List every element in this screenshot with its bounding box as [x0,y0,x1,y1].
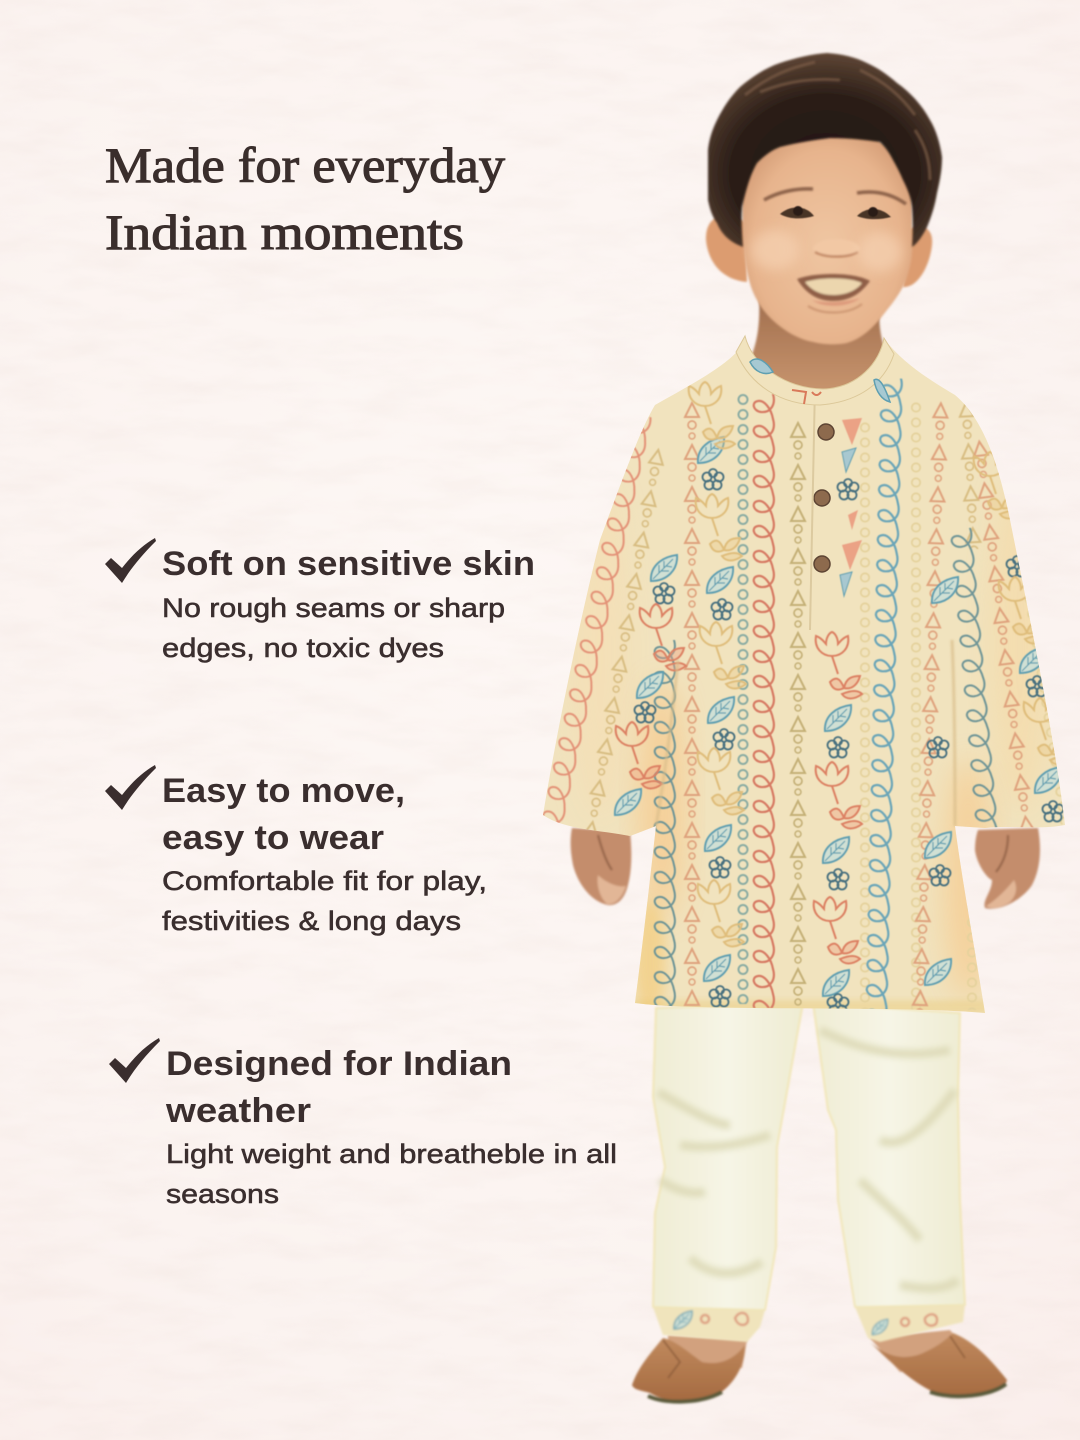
hair [708,53,942,247]
ears [706,216,932,287]
neck [750,285,885,395]
heading: designed for Indian weather [165,1045,512,1130]
placket [810,385,815,630]
text: soft on sensitive skin detail: edges, no toxic dyes [162,633,444,663]
illustration: smiling boy in printed kurta [537,53,1073,1402]
title [105,137,505,260]
right hand [975,828,1040,909]
heading: designed for Indian weather: weather [165,1092,311,1130]
eyes [780,206,891,219]
buttons [814,424,834,572]
title: Made for everyday [105,137,505,193]
smile [797,274,870,313]
pyjama trousers [653,1003,965,1342]
collar print [750,359,890,404]
print columns [537,378,1073,1012]
print motifs [615,382,1070,1014]
text: easy to move detail: festivities & long days [162,906,461,936]
benefit: designed for Indian weather [109,1038,617,1209]
heading: easy to move, easy to wear: Easy to move, [162,772,405,810]
kurta [537,340,1073,1020]
text: designed for Indian weather detail: Light weight and breatheble in all [166,1139,617,1169]
heading: designed for Indian weather: Designed for Indian [166,1045,512,1083]
text: easy to move detail [162,866,487,936]
benefit: soft on sensitive skin [105,538,535,663]
benefit: easy to move [105,765,487,936]
heading: easy to move, easy to wear [162,772,405,857]
text: designed for Indian weather detail: seasons [166,1179,279,1209]
kurta tints [572,470,1050,1020]
text: soft on sensitive skin detail: No rough seams or sharp [162,593,505,623]
text: soft on sensitive skin detail [162,593,505,663]
title: Indian moments [105,204,464,260]
kurta sleeve seams [656,640,955,826]
heading: soft on sensitive skin: Soft on sensitive skin [162,545,535,583]
collar [736,336,894,405]
nose [813,239,860,256]
text: easy to move detail: Comfortable fit for play, [162,866,487,896]
left hand [571,828,631,905]
icon: check mark [109,1038,160,1083]
icon: check mark [105,765,156,810]
text: designed for Indian weather detail [166,1139,617,1209]
cheeks [751,230,902,272]
shoes [632,1330,1007,1402]
face [742,125,912,344]
heading: easy to move, easy to wear: easy to wear [162,819,384,857]
eyebrows [764,189,906,204]
icon: check mark [105,538,156,583]
